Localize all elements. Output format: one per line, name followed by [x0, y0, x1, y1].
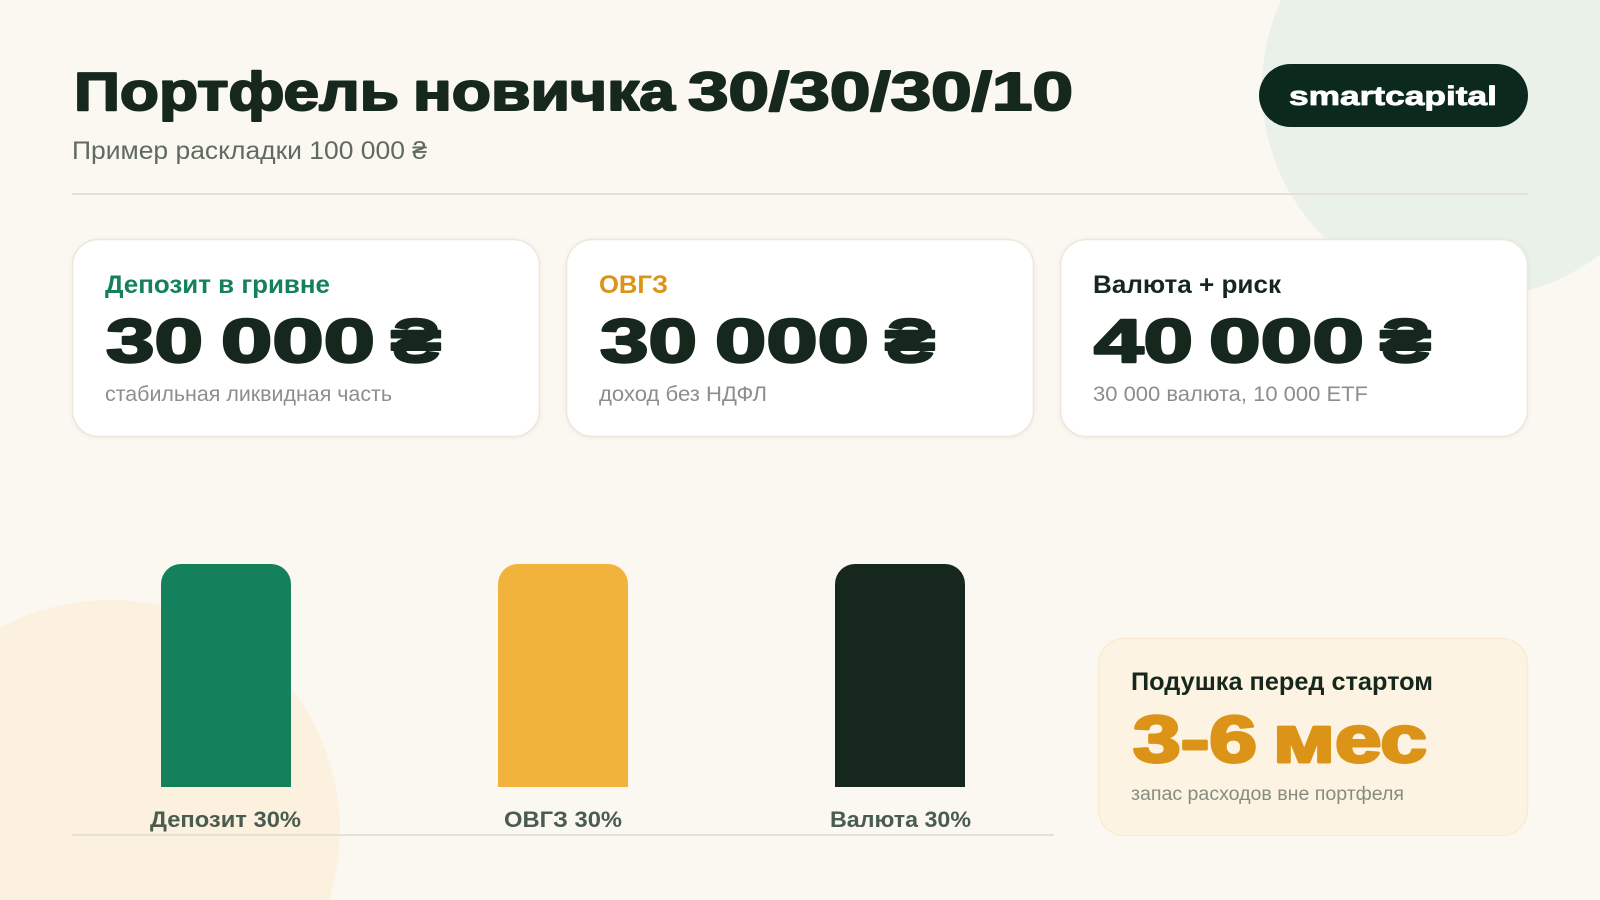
card label: currency: Валюта + риск: [1093, 271, 1282, 299]
card note: currency: 30 000 валюта, 10 000 ETF: [1093, 383, 1368, 406]
bar: OVGZ: [498, 564, 628, 787]
card value: currency: 000: [1209, 307, 1364, 375]
panel: OVGZ card: [566, 240, 1034, 436]
card value: currency: 40: [1094, 307, 1193, 375]
callout: cushion before start: [1098, 638, 1528, 836]
subtitle: Пример раскладки 100 000 ₴: [72, 137, 427, 165]
card value: deposit: 000: [221, 307, 375, 375]
card note: deposit: стабильная ликвидная часть: [105, 383, 392, 406]
panel: deposit card: [72, 240, 540, 436]
card value: deposit: 30: [106, 307, 203, 375]
card value: OVGZ: 30: [600, 307, 697, 375]
card label: deposit: Депозит в гривне: [105, 271, 330, 299]
background circle: green top right: [1262, 0, 1600, 298]
callout heading: Подушка перед стартом: [1131, 668, 1433, 696]
background circle: cream bottom left: [0, 600, 340, 900]
card value: deposit: ₴: [391, 307, 441, 375]
bar label: deposit: Депозит 30%: [150, 807, 301, 832]
bar label: currency: Валюта 30%: [830, 807, 971, 832]
panel: currency and risk card: [1060, 240, 1528, 436]
card value: OVGZ: ₴: [885, 307, 935, 375]
card value: currency: ₴: [1380, 307, 1431, 375]
callout value: мес: [1273, 702, 1427, 776]
title: 30/30/30/10: [688, 62, 1073, 122]
card value: OVGZ: 000: [715, 307, 869, 375]
title: Портфель: [74, 62, 399, 122]
brand badge: [1259, 64, 1528, 127]
card label: OVGZ: ОВГЗ: [599, 271, 668, 299]
bar chart: [72, 564, 1054, 836]
title: новичка: [413, 62, 676, 122]
callout value: 3-6: [1133, 702, 1257, 776]
card note: OVGZ: доход без НДФЛ: [599, 383, 767, 406]
brand badge: smartcapital: [1289, 81, 1497, 111]
bar: deposit: [161, 564, 291, 787]
callout note: запас расходов вне портфеля: [1131, 784, 1404, 805]
bar label: OVGZ: ОВГЗ 30%: [504, 807, 622, 832]
bar: currency: [835, 564, 965, 787]
